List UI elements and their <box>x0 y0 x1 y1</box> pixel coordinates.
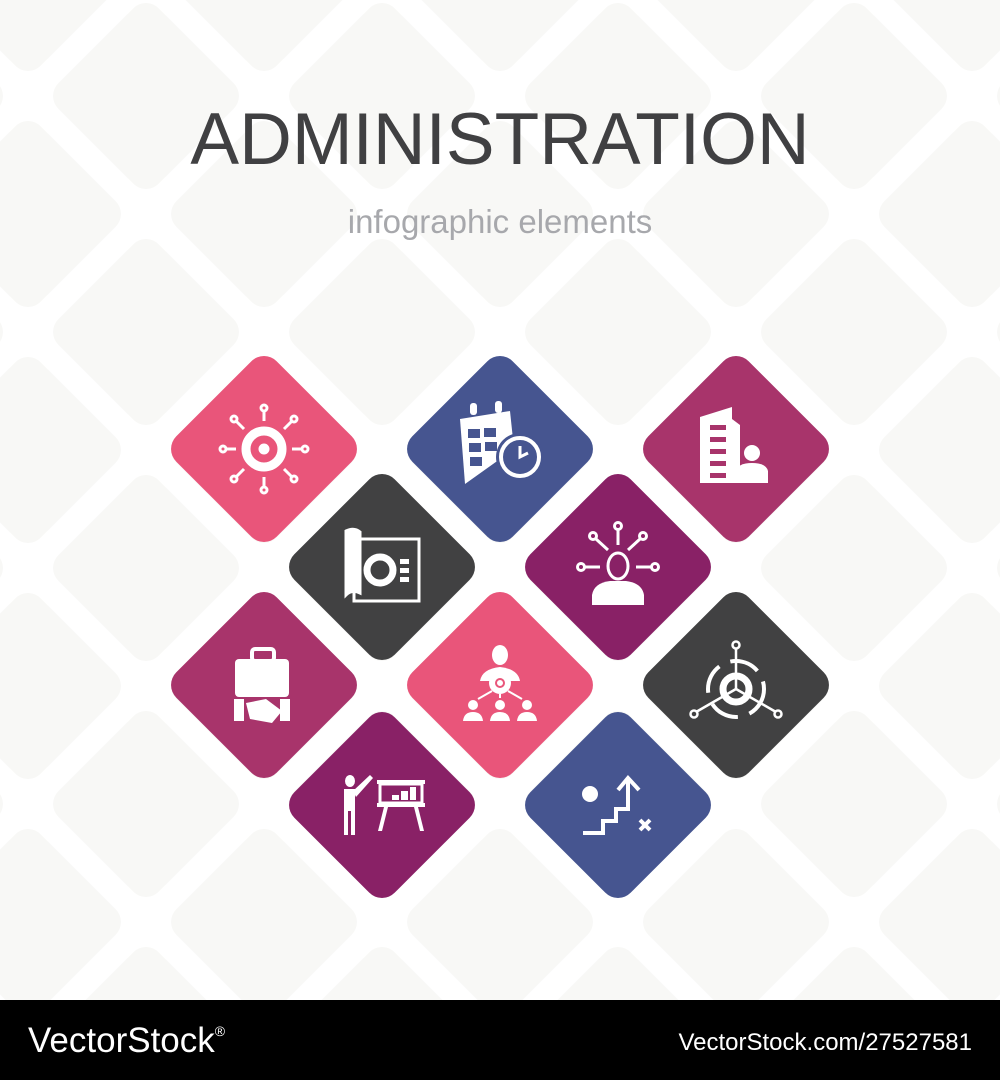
diamond: strategy cycle <box>636 585 836 785</box>
diamond: stairs goal <box>518 705 718 905</box>
diamond: presentation <box>282 705 482 905</box>
footer url: VectorStock.com/27527581 <box>678 1029 972 1056</box>
diamond: blueprint plan <box>282 467 482 667</box>
footer logo: ® <box>215 1023 226 1039</box>
diamond: manager hierarchy <box>400 585 600 785</box>
diamond: gear network <box>164 349 364 549</box>
footer logo: VectorStock <box>28 1021 215 1060</box>
subtitle: infographic elements <box>348 203 652 240</box>
footer bar <box>0 1000 1000 1080</box>
diamond: office building and manager <box>636 349 836 549</box>
diamond: partnership briefcase handshake <box>164 585 364 785</box>
diamond: idea person network <box>518 467 718 667</box>
title: ADMINISTRATION <box>190 99 810 180</box>
diamond: calendar clock <box>400 349 600 549</box>
